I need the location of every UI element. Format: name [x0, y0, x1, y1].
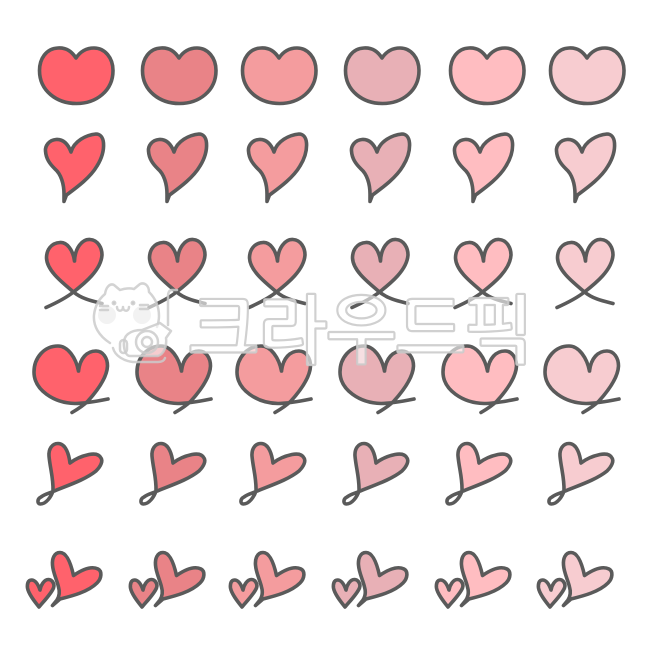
row 2: tilted pointed hearts — [45, 134, 615, 202]
row 1: round hearts — [40, 48, 624, 104]
row 4: fat hearts with crossed tail — [34, 346, 619, 412]
watermark: cat with camera — [94, 283, 177, 362]
watermark: brand text: 크라우드픽 — [189, 289, 534, 373]
row 5: hearts with looped tail — [38, 444, 613, 504]
row 3: ribbon-crossed hearts — [46, 239, 613, 308]
row 6: double hearts — [27, 552, 612, 607]
